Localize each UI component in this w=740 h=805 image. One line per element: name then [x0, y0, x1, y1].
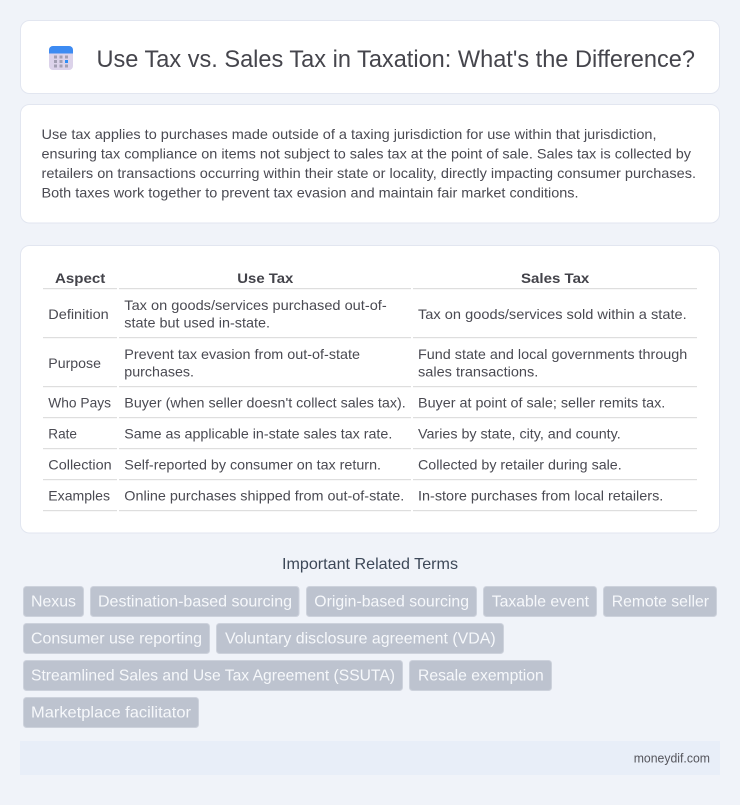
text block: introduction paragraph	[42, 126, 696, 200]
panel: title header	[20, 20, 720, 94]
table row: collection: Self-reported by consumer on tax return.	[124, 457, 381, 473]
table row: definition: state but used in-state.	[124, 315, 270, 331]
tag: Marketplace facilitator: Marketplace facilitator	[31, 705, 192, 722]
panel: introduction	[20, 104, 720, 223]
table row: rate: Same as applicable in-state sales tax rate.	[124, 426, 392, 442]
table row: purpose: sales transactions.	[418, 364, 538, 380]
table row: examples: Online purchases shipped from out-of-state.	[124, 488, 404, 504]
tag: Resale exemption	[410, 660, 552, 690]
footer	[20, 741, 720, 775]
table row: examples	[48, 488, 663, 504]
table row: collection: Collected by retailer during sale.	[418, 457, 622, 473]
tag: Remote seller	[604, 586, 716, 616]
table row: definition: Tax on goods/services purchased out-of-	[124, 297, 387, 313]
table row: collection: Collection	[48, 457, 112, 473]
heading: title: Use Tax vs. Sales Tax in Taxation: What's the Difference?	[96, 46, 695, 73]
tag: Nexus	[24, 586, 84, 616]
tag: Streamlined Sales and Use Tax Agreement (SSUTA)	[24, 660, 402, 690]
table row: purpose: Purpose	[48, 355, 101, 371]
table row: rate: Varies by state, city, and county.	[418, 426, 621, 442]
table header row: Aspect	[55, 270, 106, 286]
table row: purpose: Fund state and local governments through	[418, 346, 687, 362]
tag: Consumer use reporting	[24, 624, 210, 654]
tag: Voluntary disclosure agreement (VDA)	[216, 624, 504, 654]
text block: introduction paragraph: ensuring tax compliance on items not subject to sales tax at the point of sale. Sales tax is collected by	[42, 146, 691, 162]
table row: definition: Tax on goods/services sold within a state.	[418, 306, 687, 322]
heading: important related terms: Important Related Terms	[282, 556, 458, 573]
table row: purpose	[48, 346, 687, 380]
table header row: Sales Tax	[521, 270, 590, 286]
icon: calendar	[49, 46, 73, 70]
table row: who pays: Buyer at point of sale; seller remits tax.	[418, 395, 665, 411]
tag: Destination-based sourcing	[90, 586, 299, 616]
text block: introduction paragraph: retailers on transactions occurring within their state or locality, directly impacting consumer purchases.	[42, 165, 696, 181]
tag: Nexus: Nexus	[31, 594, 76, 611]
table row: purpose: Prevent tax evasion from out-of-state	[124, 346, 360, 362]
tag: Origin-based sourcing: Origin-based sourcing	[314, 594, 469, 611]
tag: Remote seller: Remote seller	[612, 594, 710, 611]
text block: introduction paragraph: Use tax applies to purchases made outside of a taxing jurisdiction for use within that jurisdiction,	[42, 126, 656, 142]
table row: who pays	[48, 395, 665, 411]
table header row	[55, 270, 590, 286]
table row: collection	[48, 457, 622, 473]
tag: Origin-based sourcing	[306, 586, 476, 616]
table row: who pays: Buyer (when seller doesn't collect sales tax).	[124, 395, 406, 411]
table row: definition: Definition	[48, 306, 109, 322]
tag: Voluntary disclosure agreement (VDA): Voluntary disclosure agreement (VDA)	[225, 631, 496, 648]
table row: examples: In-store purchases from local retailers.	[418, 488, 663, 504]
tag: Consumer use reporting: Consumer use reporting	[31, 631, 202, 648]
text block: introduction paragraph: Both taxes work together to prevent tax evasion and maintain fair market conditions.	[42, 184, 578, 200]
table header row: Use Tax	[237, 270, 294, 286]
tag: Resale exemption: Resale exemption	[418, 668, 544, 685]
panel: comparison table	[20, 246, 720, 533]
table row: examples: Examples	[48, 488, 110, 504]
tag: Destination-based sourcing: Destination-based sourcing	[98, 594, 292, 611]
tag: Streamlined Sales and Use Tax Agreement (SSUTA): Streamlined Sales and Use Tax Agreement (SSUTA)	[31, 668, 395, 685]
table row: purpose: purchases.	[124, 364, 194, 380]
table row: rate	[48, 426, 621, 442]
tag: Marketplace facilitator	[24, 698, 198, 728]
tag: Taxable event: Taxable event	[492, 594, 590, 611]
tag list: related terms	[24, 586, 716, 728]
table row: definition	[48, 297, 687, 331]
table row: who pays: Who Pays	[48, 395, 111, 411]
footer: moneydif.com	[634, 751, 710, 765]
tag: Taxable event	[484, 586, 596, 616]
table row: rate: Rate	[48, 426, 77, 442]
